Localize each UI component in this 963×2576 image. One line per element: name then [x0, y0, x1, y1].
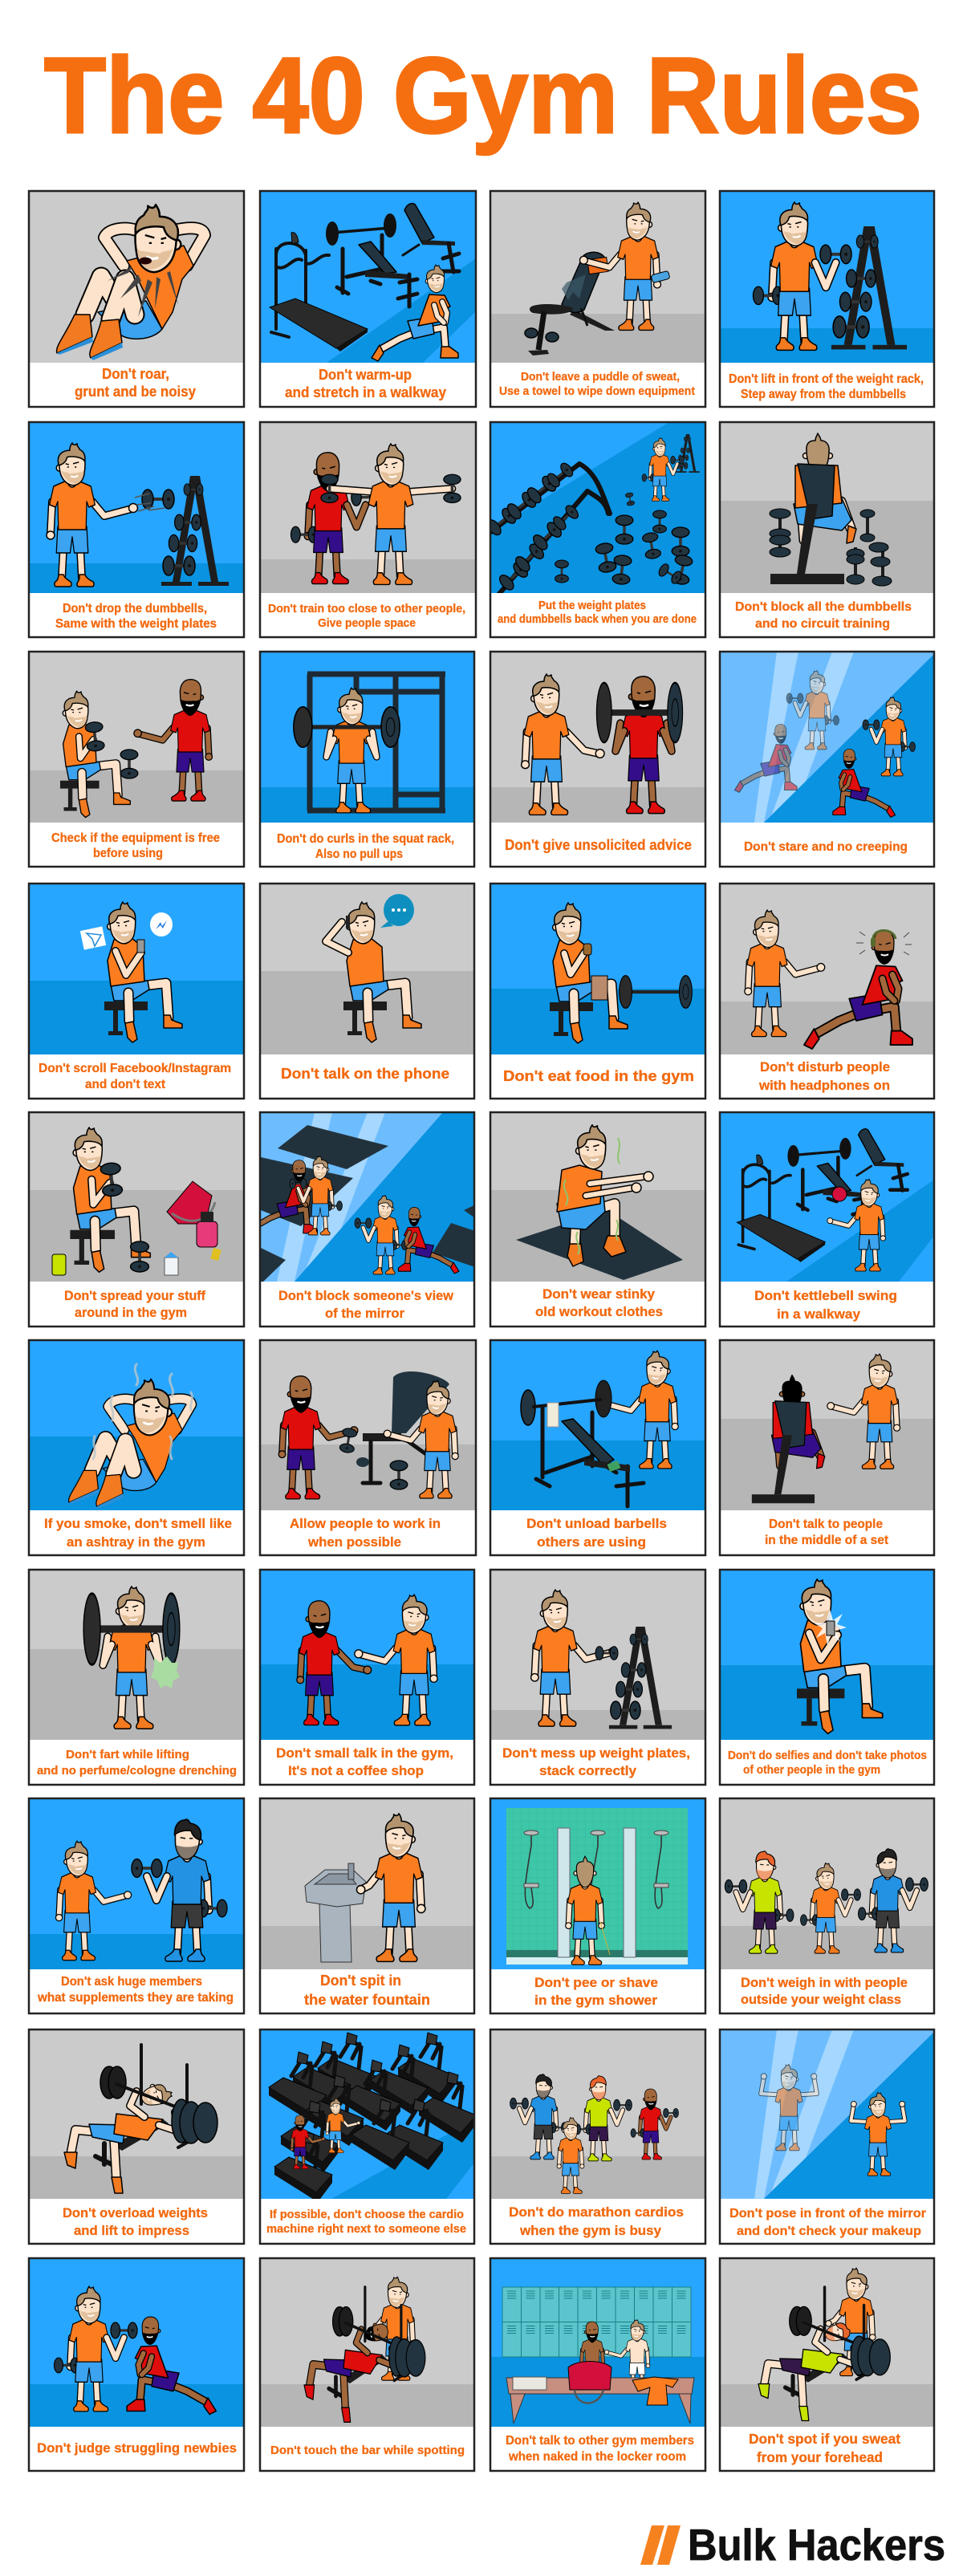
caption — [749, 2431, 900, 2465]
panel 12: don't stare — [720, 652, 934, 867]
panel 11: no unsolicited advice — [490, 652, 705, 867]
caption — [39, 1062, 231, 1091]
panel 18: don't block the mirror — [248, 1112, 477, 1327]
caption — [729, 2207, 926, 2238]
caption: Don't scroll Facebook/Instagram — [39, 1062, 231, 1075]
caption — [277, 832, 454, 861]
illustration: sweating spotter and bench presser — [758, 2268, 890, 2420]
caption: Check if the equipment is free — [51, 831, 220, 845]
panel 39: locker room talk — [490, 2258, 705, 2471]
caption: grunt and be noisy — [75, 384, 196, 400]
illustration: two men chatting — [297, 1595, 437, 1725]
caption: Allow people to work in — [290, 1516, 441, 1531]
illustration: gym equipment and lunging man — [270, 204, 459, 361]
illustration: dropping dumbbell — [47, 443, 229, 587]
panel 37: don't judge newbies — [29, 2258, 244, 2471]
caption: Use a towel to wipe down equipment — [499, 384, 695, 398]
caption — [55, 602, 217, 631]
illustration: man disturbing lunger with headphones — [745, 910, 912, 1049]
caption: Put the weight plates — [538, 599, 646, 612]
caption — [728, 1749, 927, 1777]
caption: stack correctly — [539, 1763, 637, 1778]
caption: Also no pull ups — [315, 847, 403, 861]
caption: Don't talk to other gym members — [506, 2434, 694, 2448]
caption — [758, 1059, 890, 1093]
panel 14: don't talk on the phone — [260, 884, 474, 1099]
panel 9: check if equipment is free — [29, 652, 244, 867]
panel 23: don't unload barbells — [490, 1340, 705, 1555]
caption: Don't talk to people — [769, 1518, 883, 1531]
caption: others are using — [537, 1534, 646, 1550]
caption — [509, 2204, 684, 2238]
panel 4: don't lift in front of the rack — [720, 191, 934, 407]
caption: If possible, don't choose the cardio — [270, 2208, 464, 2221]
panel 15: don't eat food — [490, 884, 705, 1099]
caption — [506, 2434, 694, 2464]
caption: in a walkway — [777, 1306, 861, 1322]
panel 34: cardio machine spacing — [260, 2030, 477, 2244]
caption: in the middle of a set — [765, 1534, 889, 1547]
panel 35: no marathon cardio — [490, 2030, 705, 2244]
illustration: messy dumbbell floor — [485, 434, 700, 594]
panel 38: don't touch the bar — [260, 2258, 474, 2471]
caption: from your forehead — [757, 2449, 883, 2465]
caption: Don't train too close to other people, — [268, 602, 465, 616]
caption: in the gym shower — [534, 1993, 657, 2008]
caption: outside your weight class — [741, 1992, 901, 2007]
caption: before using — [93, 847, 163, 860]
caption: Don't unload barbells — [526, 1516, 667, 1531]
illustration: smoky sit-up — [69, 1364, 192, 1509]
panel 26: no small talk — [260, 1570, 474, 1785]
illustration: man eating on bench next to barbell — [550, 903, 692, 1043]
caption: with headphones on — [758, 1078, 890, 1093]
caption: and no circuit training — [755, 617, 890, 631]
panel 33: don't overload weights — [29, 2030, 244, 2244]
illustration: man advising barbell lifter — [522, 674, 683, 815]
caption: Step away from the dumbbells — [741, 388, 906, 401]
caption: Don't do marathon cardios — [509, 2204, 684, 2220]
illustration: lifting and farting — [83, 1587, 180, 1729]
caption — [535, 1286, 663, 1319]
caption: old workout clothes — [535, 1304, 663, 1319]
caption — [765, 1518, 889, 1547]
illustration: curling in squat rack — [294, 674, 445, 813]
panel 16: don't disturb with headphones — [720, 884, 934, 1099]
illustration: two men crowded — [291, 444, 461, 584]
illustration: seated man and pointing man — [60, 677, 213, 818]
caption: Don't roar, — [102, 366, 169, 382]
caption: Don't overload weights — [63, 2205, 208, 2220]
panel 32: don't weigh in with others — [720, 1798, 934, 2013]
caption: Don't block all the dumbbells — [735, 600, 912, 614]
caption: and don't check your makeup — [737, 2225, 921, 2238]
illustration: locker room — [502, 2287, 694, 2424]
illustration: three lifters of different size — [725, 1847, 928, 1953]
panel 17: don't spread your stuff — [29, 1112, 244, 1327]
caption — [741, 1975, 908, 2007]
caption — [37, 1975, 234, 2005]
caption: Don't do curls in the squat rack, — [277, 832, 454, 846]
panel 13: don't scroll facebook — [29, 884, 244, 1099]
illustration: rows of treadmills — [269, 2033, 477, 2202]
caption: Don't spot if you sweat — [749, 2431, 900, 2447]
caption: Don't small talk in the gym, — [276, 1745, 453, 1761]
illustration: man asking big guy — [55, 1818, 227, 1961]
caption: Don't eat food in the gym — [503, 1067, 694, 1084]
caption — [268, 602, 465, 630]
illustration: mirror reflections and people — [734, 670, 915, 817]
illustration: man at water fountain — [305, 1814, 425, 1962]
caption: of other people in the gym — [743, 1763, 880, 1777]
illustration: man reaching to rack — [531, 1590, 672, 1729]
panel 30: don't spit in fountain — [260, 1798, 474, 2013]
caption: Don't warm-up — [319, 367, 412, 383]
caption: and no perfume/cologne drenching — [37, 1764, 237, 1778]
caption: and don't text — [85, 1078, 165, 1091]
caption: Don't kettlebell swing — [754, 1288, 897, 1303]
caption: Don't drop the dumbbells, — [63, 602, 207, 616]
caption — [64, 1288, 205, 1320]
panel 1: don't roar — [29, 191, 244, 407]
caption: the water fountain — [304, 1992, 430, 2008]
caption: Don't spread your stuff — [64, 1288, 205, 1303]
illustration: sharing a bench — [278, 1371, 458, 1499]
caption: Don't pose in front of the mirror — [729, 2207, 926, 2220]
caption: Don't lift in front of the weight rack, — [729, 372, 924, 386]
panel 40: don't sweat while spotting — [720, 2258, 934, 2471]
caption: Don't leave a puddle of sweat, — [521, 370, 680, 384]
caption: Don't disturb people — [760, 1059, 890, 1075]
caption: around in the gym — [75, 1305, 187, 1320]
caption — [290, 1516, 441, 1550]
caption — [304, 1973, 430, 2008]
caption: and stretch in a walkway — [285, 384, 446, 400]
caption: and lift to impress — [74, 2223, 189, 2238]
caption: when naked in the locker room — [508, 2450, 686, 2464]
caption: Don't touch the bar while spotting — [270, 2444, 465, 2457]
illustration: curling man and lunging man — [55, 2286, 216, 2415]
panel 6: don't train too close — [260, 422, 476, 637]
caption — [63, 2205, 208, 2238]
caption — [735, 600, 912, 631]
caption: Don't weigh in with people — [741, 1975, 908, 1990]
caption — [534, 1975, 658, 2008]
illustration: shower stalls and man — [506, 1828, 688, 1965]
caption: Don't talk on the phone — [281, 1066, 449, 1082]
caption: when possible — [307, 1534, 401, 1550]
panel 10: no curls in the squat rack — [260, 652, 474, 867]
illustration: man wiping bench — [525, 202, 670, 356]
logo: Bulk Hackers: Bulk Hackers — [688, 2520, 945, 2570]
caption: Don't block someone's view — [278, 1288, 454, 1303]
panel 24: don't talk mid-set — [720, 1340, 934, 1555]
caption: Give people space — [318, 616, 416, 630]
caption — [285, 367, 446, 400]
illustration: talking to a seated lifter — [752, 1354, 900, 1503]
illustration: seated man on call with speech bubble — [326, 894, 421, 1042]
panel 28: no selfies — [720, 1570, 934, 1785]
panel 19: no stinky clothes — [490, 1112, 705, 1327]
panel 21: smell like an ashtray — [29, 1340, 244, 1555]
caption — [729, 372, 924, 401]
caption: what supplements they are taking — [37, 1991, 234, 2005]
illustration: mats, reflections and people — [248, 1125, 477, 1284]
illustration: curling at the rack — [753, 202, 907, 350]
caption: machine right next to someone else — [266, 2222, 466, 2236]
caption — [75, 366, 196, 400]
caption: Don't mess up weight plates, — [502, 1745, 690, 1761]
caption: Don't judge struggling newbies — [37, 2441, 237, 2456]
caption: Don't pee or shave — [534, 1975, 658, 1990]
caption — [37, 1748, 237, 1778]
caption — [266, 2208, 466, 2236]
illustration: squatting man on mat — [516, 1125, 683, 1280]
panel 3: don't leave sweat — [490, 191, 705, 407]
caption — [278, 1288, 454, 1321]
panel 25: don't fart — [29, 1570, 244, 1785]
caption: an ashtray in the gym — [67, 1534, 205, 1550]
caption: Don't wear stinky — [542, 1286, 656, 1302]
panel 27: don't mess up plates — [490, 1570, 705, 1785]
caption: Don't ask huge members — [61, 1975, 202, 1989]
caption: Don't stare and no creeping — [744, 840, 908, 854]
caption — [44, 1516, 232, 1550]
illustration: man seated in front of dumbbells — [770, 433, 892, 586]
caption — [526, 1516, 667, 1550]
caption: and dumbbells back when you are done — [498, 613, 697, 626]
caption — [498, 599, 697, 626]
caption: It's not a coffee shop — [288, 1763, 424, 1778]
illustration: unloading a bench barbell — [521, 1351, 678, 1506]
caption: when the gym is busy — [519, 2223, 662, 2238]
caption: Don't fart while lifting — [66, 1748, 189, 1761]
title: The 40 Gym Rules — [44, 36, 922, 156]
panel 36: don't pose in the mirror — [720, 2030, 934, 2244]
panel 20: don't swing kettlebell — [720, 1112, 934, 1327]
illustration: seated man with scattered gear — [52, 1128, 221, 1275]
panel 7: put the weights back — [485, 422, 705, 637]
illustration: spotter and bench presser — [304, 2277, 425, 2422]
panel 31: don't pee in the shower — [490, 1798, 705, 2013]
caption: Don't spit in — [320, 1973, 401, 1989]
panel 8: don't block the dumbbells — [720, 422, 934, 637]
caption: Don't do selfies and don't take photos — [728, 1749, 927, 1762]
illustration: overloaded bench press — [64, 2045, 217, 2193]
panel 22: allow people to work in — [260, 1340, 476, 1555]
panel 2: don't warm-up in a walkway — [260, 191, 476, 407]
illustration: roaring sit-up — [57, 205, 205, 360]
illustration: people waiting while someone walks — [510, 2073, 679, 2193]
panel 5: don't drop the dumbbells — [29, 422, 244, 637]
caption — [51, 831, 220, 860]
illustration: seated man taking selfie — [797, 1579, 883, 1733]
illustration: flexing man and reflection — [761, 2064, 905, 2176]
illustration: seated man on phone — [80, 902, 182, 1042]
caption — [502, 1745, 690, 1778]
panel 29: don't ask huge members — [29, 1798, 244, 2013]
illustration: gym equipment with kettlebell man — [737, 1129, 908, 1271]
caption — [754, 1288, 897, 1322]
caption: Don't give unsolicited advice — [505, 837, 692, 853]
caption: Same with the weight plates — [55, 617, 217, 631]
caption: of the mirror — [325, 1306, 404, 1321]
caption — [499, 370, 695, 398]
caption — [276, 1745, 453, 1778]
caption: If you smoke, don't smell like — [44, 1516, 232, 1531]
